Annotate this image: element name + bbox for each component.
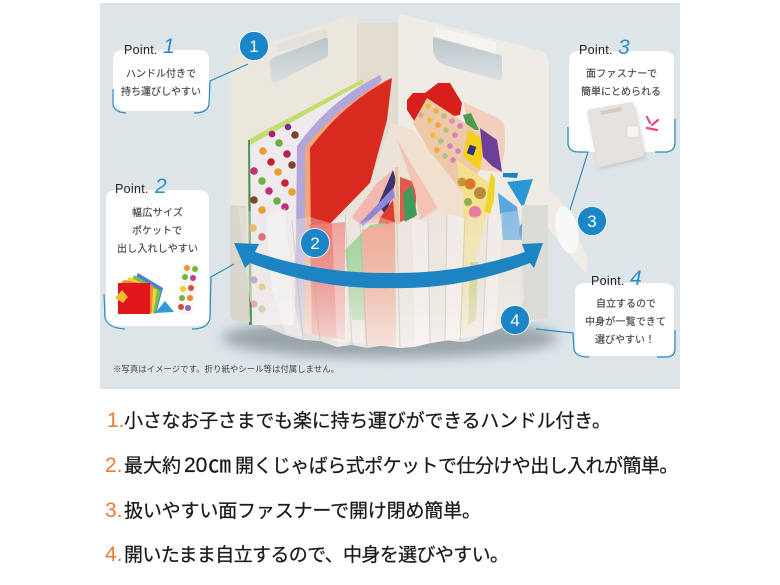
feature line 2: 開くじゃばら式ポケットで仕分けや出し入れが簡単。 xyxy=(235,455,678,477)
callout: Point 1: 1 xyxy=(163,35,175,58)
badge: 3: 3 xyxy=(587,212,597,231)
callout: Point 4 xyxy=(536,267,675,357)
badge: 1: 1 xyxy=(249,37,259,56)
badge: 2 xyxy=(300,228,330,258)
panel: product photo background xyxy=(100,3,680,389)
feature line 3: 3. xyxy=(105,499,123,522)
translucent accordion pocket xyxy=(238,206,524,348)
center pocket contents xyxy=(352,167,417,226)
feature line 1: 1. xyxy=(107,409,125,432)
feature line 2: 最大約 xyxy=(124,455,181,477)
badge: 4: 4 xyxy=(510,311,520,330)
callout: Point 3: 面ファスナーで xyxy=(586,68,657,80)
icon: closed folder xyxy=(587,102,646,169)
green sticker xyxy=(463,113,479,130)
right peach sheet xyxy=(463,102,505,172)
feature line 4: 開いたまま自立するので、中身を選びやすい。 xyxy=(124,544,509,566)
blue triangles xyxy=(498,173,533,243)
red folder xyxy=(310,78,392,335)
callout: Point 4: 中身が一覧できて xyxy=(585,315,666,328)
feature line 3: 扱いやすい面ファスナーで開け閉め簡単。 xyxy=(124,500,481,522)
callout: Point 4: 4 xyxy=(630,267,642,290)
callout: Point 3: 3 xyxy=(618,36,630,59)
feature line 4: 4. xyxy=(105,543,123,566)
callout: Point 3: Point. xyxy=(579,43,613,57)
orange folder in front pocket xyxy=(362,222,396,345)
dinosaur sticker xyxy=(480,128,502,172)
floor shadow xyxy=(222,318,558,358)
right side flap xyxy=(520,205,548,322)
callout: Point 4: 選びやすい！ xyxy=(595,333,655,346)
polka dot paper xyxy=(248,79,363,325)
feature line 2: 20 xyxy=(184,454,207,477)
left side flap xyxy=(230,205,250,322)
red stickers xyxy=(407,83,462,122)
feature line 2: 2. xyxy=(105,454,123,477)
product: expanding file organizer xyxy=(222,15,588,358)
pocket back fill xyxy=(330,123,522,348)
badge: 4 xyxy=(500,306,530,334)
callout: Point 2: 2 xyxy=(154,175,167,198)
feature line 1: 小さなお子さまでも楽に持ち運びができるハンドル付き。 xyxy=(124,410,611,432)
badge: 1 xyxy=(240,32,268,60)
yellow figure sticker xyxy=(485,173,495,214)
callout: Point 1 xyxy=(113,35,248,113)
icon: fruit sticker sheet xyxy=(177,263,200,315)
lavender paper layers xyxy=(295,75,382,335)
center back panel xyxy=(357,23,399,313)
red folder in pocket bottom xyxy=(310,222,345,340)
tan center flap over the stickers xyxy=(390,123,463,217)
callout: Point 2 xyxy=(104,175,234,329)
callout: Point 3 xyxy=(568,36,675,210)
callout: Point 4: Point. xyxy=(591,274,625,288)
lower fruit stickers in pocket xyxy=(468,262,478,325)
icon: origami paper xyxy=(115,273,174,314)
callout: Point 1: Point. xyxy=(124,43,158,57)
callout: Point 2: ポケットで xyxy=(132,225,182,237)
arrow: double-headed blue swing arrow xyxy=(234,243,543,288)
icon: pink emphasis marks xyxy=(647,117,658,130)
green folded paper in front pocket xyxy=(345,223,385,320)
callout: Point 4: 自立するので xyxy=(596,297,656,310)
feature line 2 xyxy=(105,451,678,477)
badge: 3 xyxy=(578,206,606,236)
photo disclaimer note: ※写真はイメージです。折り紙やシール等は付属しません。 xyxy=(113,364,339,374)
flower sticker sheet xyxy=(413,98,485,193)
callout: Point 2: Point. xyxy=(115,182,149,196)
fruit sticker sheet xyxy=(457,160,492,330)
callout: Point 1: 持ち運びしやすい xyxy=(121,85,201,98)
callout: Point 3: 簡単にとめられる xyxy=(581,85,661,98)
callout: Point 2: 幅広サイズ xyxy=(132,206,183,219)
callout: Point 1: ハンドル付きで xyxy=(126,67,196,80)
right board with handle and hook-and-loop flap xyxy=(398,15,588,322)
orange paper layer xyxy=(305,78,390,335)
pink sheet inside center pocket xyxy=(396,138,438,220)
callout: Point 2: 出し入れしやすい xyxy=(117,243,198,255)
badge: 2: 2 xyxy=(310,234,320,253)
feature line 2: ㎝ xyxy=(208,451,231,477)
left board with handle xyxy=(230,15,358,320)
